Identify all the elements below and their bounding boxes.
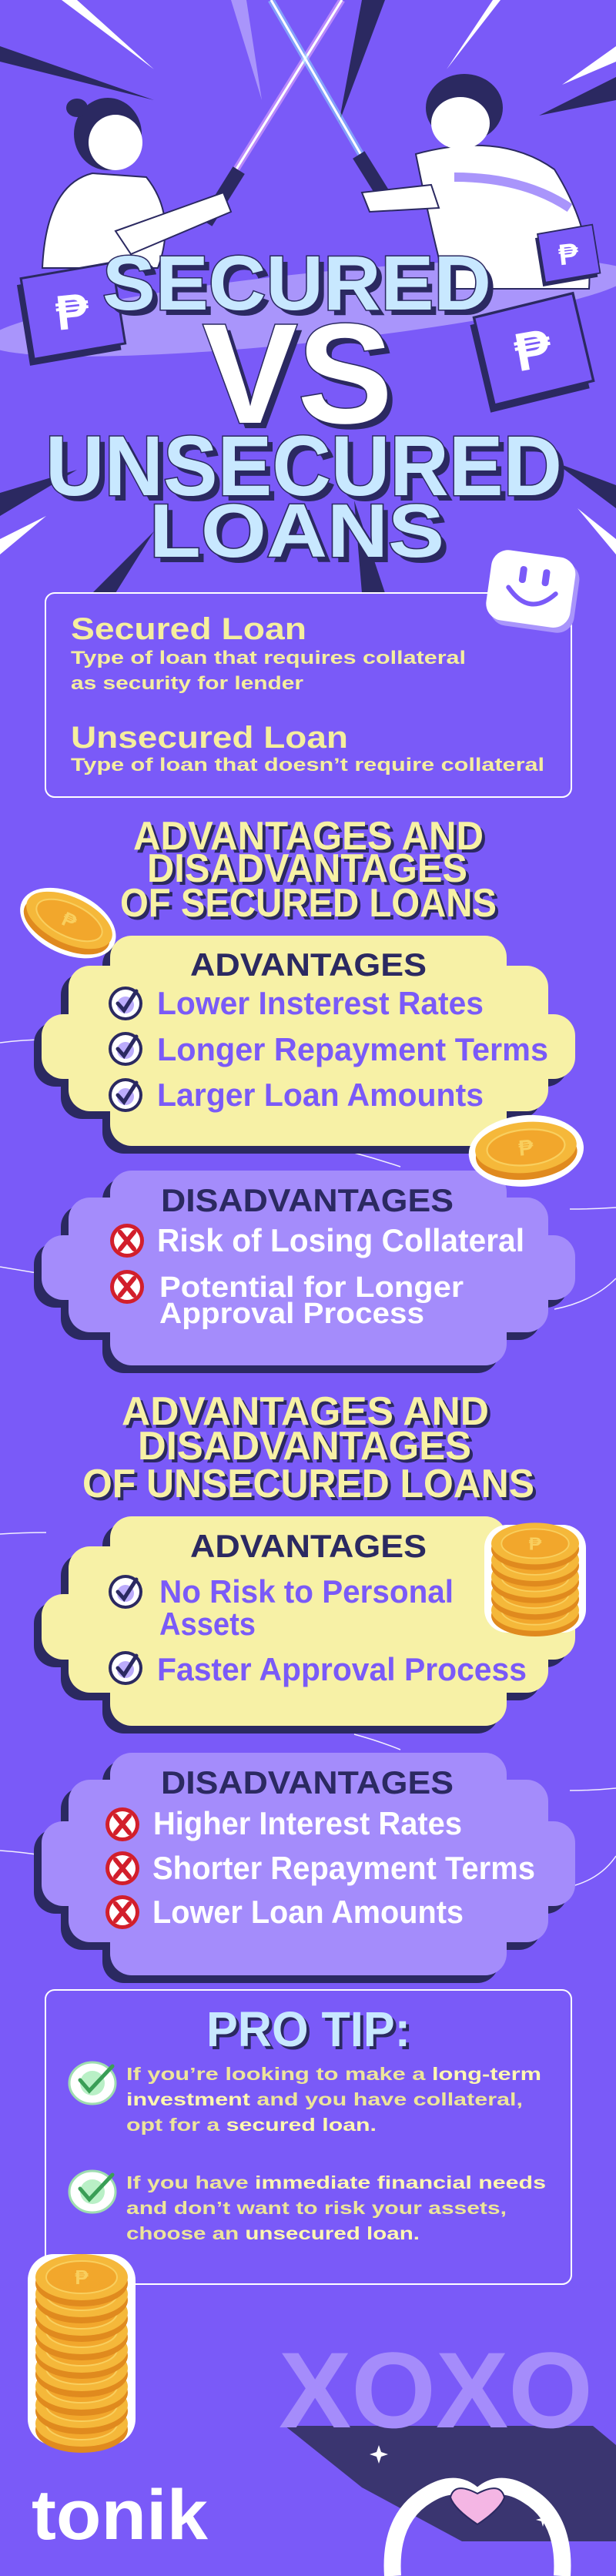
heading: secured loans pros & cons: OF SECURED LOANS	[123, 884, 500, 929]
heading: unsecured loans pros & cons: OF UNSECURED LOANS	[85, 1465, 537, 1509]
title: SECURED	[108, 246, 497, 332]
text: secured loan definition: Type of loan that requires collateral	[71, 648, 466, 668]
background rays	[0, 0, 616, 593]
heading: unsecured loans pros & cons: DISADVANTAGES	[138, 1424, 471, 1469]
icon: green check 1	[69, 2062, 116, 2104]
title: VS	[208, 300, 398, 459]
text: secured loan definition	[71, 612, 544, 775]
tip 1 text: opt for a secured loan.	[126, 2115, 377, 2135]
heading: secured loans pros & cons: ADVANTAGES AND	[136, 817, 487, 862]
heading: disadvantages: DISADVANTAGES	[161, 1764, 454, 1801]
heading: unsecured loans pros & cons: OF UNSECURED LOANS	[82, 1462, 534, 1506]
text: secured loan definition: Secured Loan	[71, 612, 306, 646]
list: secured advantages: Longer Repayment Terms	[157, 1031, 548, 1067]
tip 1 text: If you’re looking to make a long-term	[126, 2064, 541, 2084]
list: unsecured advantages: Faster Approval Process	[157, 1651, 527, 1687]
panel: pro tip	[45, 1990, 571, 2284]
heading: pro tip: PRO TIP:	[209, 2005, 413, 2060]
heading: secured loans pros & cons: ADVANTAGES AND	[133, 814, 484, 859]
panel: secured disadvantages	[34, 1171, 575, 1373]
list: unsecured advantages	[109, 1573, 527, 1687]
title: LOANS	[155, 494, 450, 578]
heading: secured loans pros & cons: OF SECURED LOANS	[120, 881, 497, 926]
icon: sparkle	[370, 2445, 388, 2464]
list: unsecured advantages: No Risk to Personal	[159, 1573, 454, 1610]
text: secured loan definition: as security for lender	[71, 673, 303, 694]
list: secured disadvantages: Risk of Losing Collateral	[157, 1222, 524, 1258]
heading: disadvantages: DISADVANTAGES	[161, 1182, 454, 1218]
icon: coin top-left	[9, 873, 127, 973]
title	[45, 240, 567, 578]
icon: green check 2	[69, 2171, 116, 2213]
list: secured disadvantages: Approval Process	[159, 1298, 424, 1330]
tip 2 text: If you have immediate financial needs	[126, 2172, 546, 2192]
icon: smiley badge	[484, 548, 582, 635]
panel: definitions	[45, 593, 571, 797]
icon: coin right	[466, 1110, 587, 1191]
tip 2 text: choose an unsecured loan.	[126, 2223, 420, 2243]
heading: secured loans pros & cons	[120, 814, 500, 929]
character right	[362, 74, 589, 289]
list: secured advantages: Larger Loan Amounts	[157, 1077, 484, 1113]
tip 2 text: and don’t want to risk your assets,	[126, 2198, 507, 2218]
list: secured advantages	[109, 985, 548, 1113]
text: secured loan definition: Unsecured Loan	[71, 721, 348, 755]
xoxo: XOXO	[279, 2330, 593, 2450]
tip 1 text: investment and you have collateral,	[126, 2089, 523, 2109]
list: unsecured advantages: Assets	[159, 1606, 256, 1642]
list: secured advantages: Lower Insterest Rates	[157, 985, 484, 1021]
panel: secured advantages	[34, 936, 575, 1154]
title: VS	[203, 295, 393, 454]
title: LOANS	[149, 488, 444, 573]
icon: peso badge left	[15, 262, 126, 367]
list: unsecured disadvantages: Lower Loan Amounts	[152, 1894, 464, 1930]
tip 1 text	[126, 2064, 541, 2135]
list: unsecured disadvantages: Shorter Repayment Terms	[152, 1850, 535, 1886]
heading: unsecured loans pros & cons: ADVANTAGES AND	[122, 1389, 489, 1434]
heading: unsecured loans pros & cons	[82, 1389, 537, 1509]
list: secured disadvantages: Potential for Longer	[159, 1271, 464, 1304]
text: secured loan definition: Type of loan that doesn’t require collateral	[71, 755, 544, 775]
title: SECURED	[102, 240, 491, 327]
decorative lines	[0, 1040, 616, 1887]
light purple swoosh	[0, 240, 616, 377]
panel: unsecured disadvantages	[34, 1753, 575, 1983]
character left	[42, 98, 231, 268]
heading: secured loans pros & cons: DISADVANTAGES	[150, 849, 470, 894]
list: unsecured disadvantages: Higher Interest Rates	[153, 1805, 462, 1841]
icon: heart hands	[393, 2487, 562, 2576]
xoxo	[279, 2330, 616, 2541]
heading: advantages: ADVANTAGES	[190, 946, 427, 983]
icon: peso badge right small	[534, 224, 601, 286]
list: unsecured disadvantages	[105, 1805, 535, 1930]
icon: peso badge right large	[467, 293, 596, 414]
title: UNSECURED	[51, 424, 567, 519]
logo: tonik: tonik	[32, 2476, 209, 2554]
list: secured disadvantages	[110, 1222, 524, 1330]
icon: coin stack bottom-left	[28, 2254, 136, 2453]
heading: pro tip: PRO TIP:	[206, 2002, 410, 2057]
heading: secured loans pros & cons: DISADVANTAGES	[147, 846, 467, 891]
lightsabers	[200, 0, 397, 226]
heading: unsecured loans pros & cons: DISADVANTAGES	[141, 1427, 474, 1472]
title: UNSECURED	[45, 419, 562, 514]
tip 2 text	[126, 2172, 546, 2243]
heading: advantages: ADVANTAGES	[190, 1528, 427, 1564]
icon: small sparkle right	[536, 2513, 550, 2527]
icon: coin stack right	[484, 1522, 586, 1636]
heading: unsecured loans pros & cons: ADVANTAGES AND	[125, 1392, 492, 1437]
panel: unsecured advantages	[34, 1516, 575, 1734]
